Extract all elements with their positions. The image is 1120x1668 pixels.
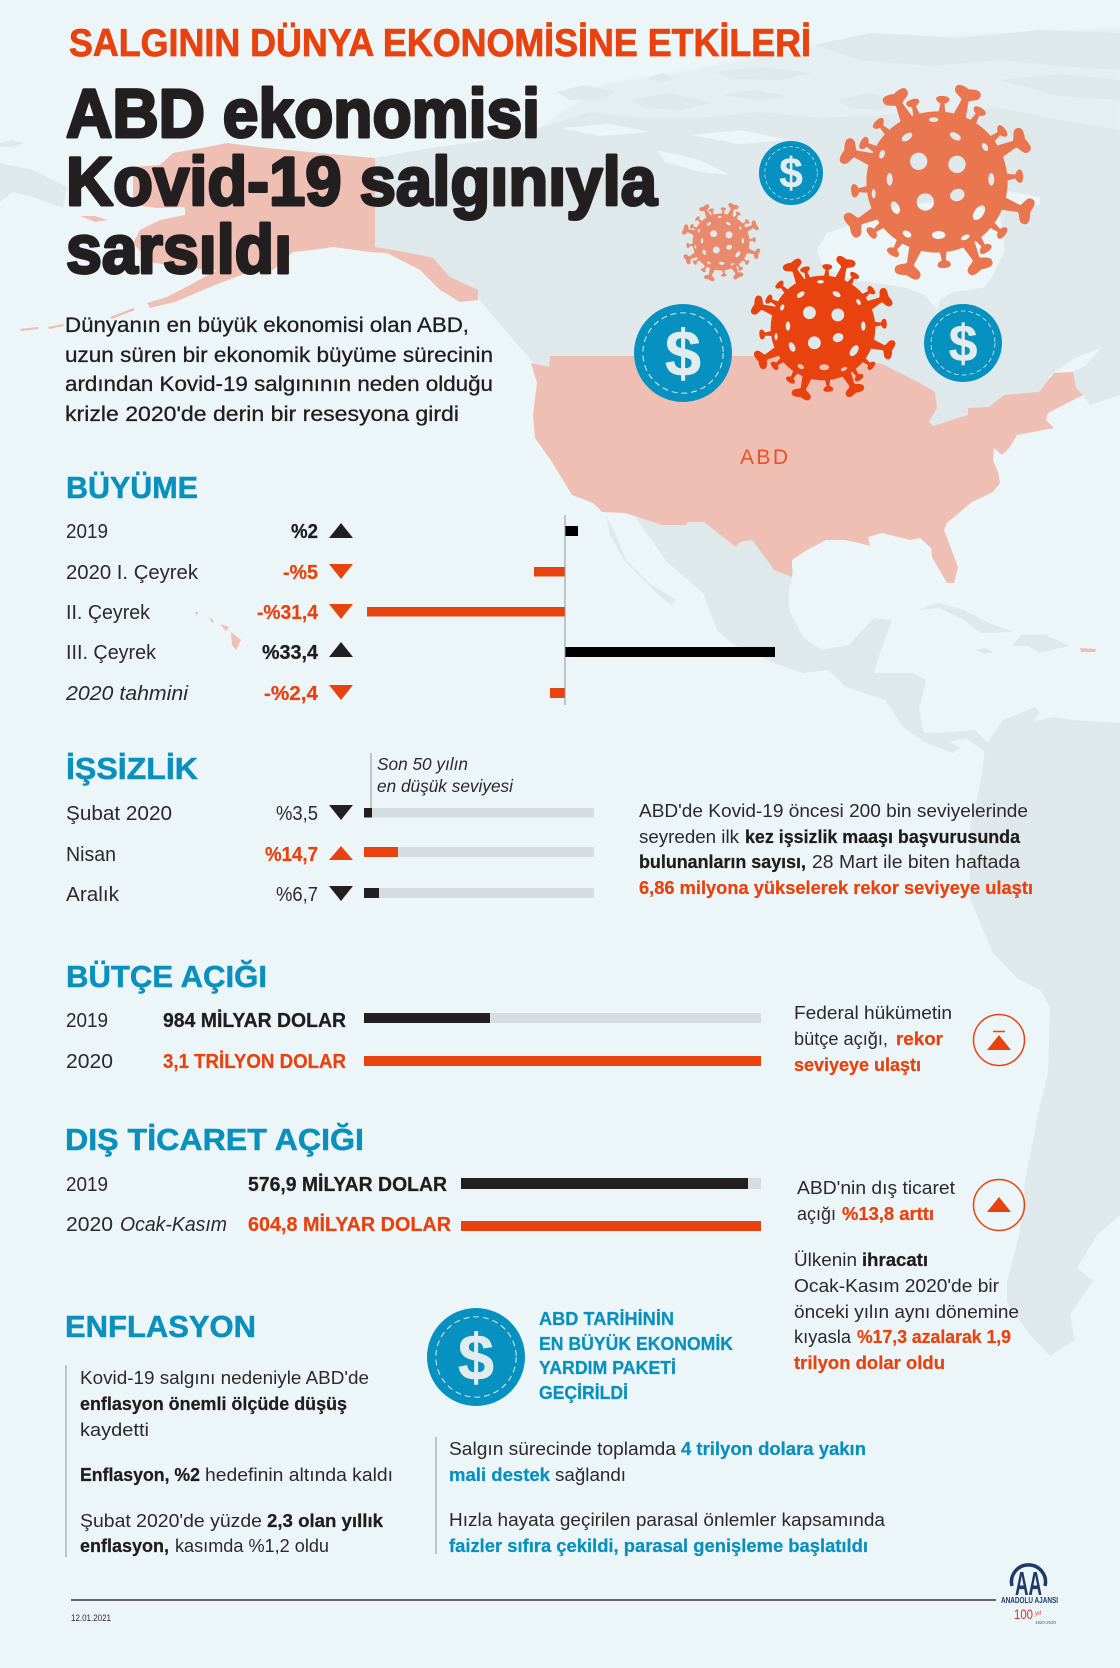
- trade row labels: Ocak-Kasım: [120, 1213, 227, 1236]
- logo: Anadolu Ajansı: [1001, 1565, 1058, 1625]
- logo: Anadolu Ajansı: 100: [1014, 1606, 1033, 1622]
- heading: trade deficit: DIŞ TİCARET AÇIĞI: [65, 1122, 364, 1157]
- trade row labels: 2020: [66, 1213, 113, 1236]
- logo: Anadolu Ajansı: AA: [1015, 1565, 1042, 1602]
- main title: [66, 75, 658, 288]
- budget row labels: 2020: [66, 1050, 113, 1073]
- unemployment note: bulunanların sayısı,: [639, 851, 806, 872]
- land: Canada and Arctic: [0, 30, 1120, 430]
- exports note: trilyon dolar oldu: [794, 1352, 945, 1373]
- stimulus text: 4 trilyon dolara yakın: [681, 1438, 866, 1459]
- budget note: [794, 1002, 952, 1075]
- annotation: lowest level in 50 years: Son 50 yılın: [377, 754, 468, 774]
- growth values: [257, 520, 319, 705]
- inflation text: kaydetti: [80, 1419, 149, 1440]
- land: South America: [970, 707, 1120, 1356]
- intro text: Dünyanın en büyük ekonomisi olan ABD,: [65, 313, 469, 337]
- stimulus text: faizler sıfıra çekildi, parasal genişleme başlatıldı: [449, 1535, 868, 1556]
- unemployment row labels: Aralık: [66, 883, 120, 906]
- icon: dollar coin small: $: [779, 150, 803, 197]
- trade row labels: 604,8 MİLYAR DOLAR: [248, 1213, 451, 1236]
- land: Mexico and Central America: [626, 500, 990, 753]
- logo: Anadolu Ajansı: 1920-2020: [1035, 1620, 1056, 1625]
- unemployment trend arrows: [329, 805, 353, 901]
- sea: Hudson Bay and streaks: [560, 124, 1102, 380]
- icon: increase: [974, 1180, 1024, 1230]
- stimulus text: mali destek: [449, 1464, 551, 1485]
- panel: trade deficit: [65, 1122, 1024, 1373]
- unemployment bar chart: [364, 808, 594, 898]
- icon: dollar coin right: $: [949, 314, 977, 372]
- icon: dollar coin right: [924, 304, 1002, 382]
- stimulus heading: [539, 1308, 734, 1403]
- budget note: seviyeye ulaştı: [794, 1054, 921, 1075]
- USA mainland: [531, 356, 1083, 583]
- panel: unemployment: [66, 751, 1033, 906]
- heading: inflation: ENFLASYON: [65, 1309, 256, 1344]
- heading: unemployment: İŞSİZLİK: [66, 751, 199, 786]
- panel: stimulus package: [427, 1308, 886, 1556]
- inflation text: Şubat 2020'de yüzde: [80, 1510, 262, 1531]
- inflation text: 2,3 olan yıllık: [267, 1510, 384, 1531]
- world map background: [0, 28, 1120, 1356]
- unemployment note: kez işsizlik maaşı başvurusunda: [745, 826, 1021, 847]
- inflation text: hedefinin altında kaldı: [205, 1464, 393, 1485]
- stimulus heading: ABD TARİHİNİN: [539, 1308, 674, 1329]
- growth trend arrows: [329, 523, 353, 700]
- unemployment note: [639, 800, 1033, 898]
- unemployment note: seyreden ilk: [639, 826, 740, 847]
- stimulus text: [436, 1437, 886, 1556]
- trade row labels: 576,9 MİLYAR DOLAR: [248, 1173, 447, 1196]
- heading: budget deficit: BÜTÇE AÇIĞI: [66, 959, 267, 994]
- label: ABD: ABD: [740, 446, 788, 469]
- stimulus text: Salgın sürecinde toplamda: [449, 1438, 677, 1459]
- trade row labels: [66, 1173, 451, 1236]
- growth row labels: II. Çeyrek: [66, 601, 151, 624]
- unemployment values: %6,7: [276, 883, 318, 906]
- land: Baja California: [606, 515, 676, 605]
- Alaska: [20, 143, 478, 331]
- exports note: Ülkenin: [794, 1249, 857, 1270]
- stimulus heading: GEÇİRİLDİ: [539, 1382, 628, 1403]
- Arctic haze: [540, 28, 1120, 135]
- budget row labels: [66, 1009, 346, 1073]
- footer rule: [71, 1599, 996, 1601]
- Hawaii: [195, 612, 241, 650]
- annotation: lowest level in 50 years: en düşük seviyesi: [377, 776, 514, 796]
- inflation text: kasımda %1,2 oldu: [175, 1535, 329, 1556]
- inflation text: [66, 1365, 393, 1557]
- land: Caribbean islands: [917, 603, 1069, 654]
- logo: Anadolu Ajansı: yıl: [1034, 1611, 1042, 1617]
- unemployment values: [265, 802, 318, 906]
- unemployment values: %3,5: [276, 802, 318, 825]
- heading: growth: BÜYÜME: [66, 470, 198, 505]
- growth row labels: 2020 I. Çeyrek: [66, 561, 199, 584]
- unemployment row labels: [66, 802, 172, 906]
- trade note: %13,8 arttı: [842, 1203, 934, 1224]
- budget note: bütçe açığı,: [794, 1028, 888, 1049]
- kicker heading: SALGININ DÜNYA EKONOMİSİNE ETKİLERİ: [69, 22, 811, 65]
- budget row labels: 2019: [66, 1009, 108, 1032]
- growth values: -%31,4: [257, 601, 319, 624]
- budget note: rekor: [896, 1028, 943, 1049]
- exports note: kıyasla: [794, 1326, 852, 1347]
- inflation text: enflasyon önemli ölçüde düşüş: [80, 1393, 347, 1414]
- logo: Anadolu Ajansı: ANADOLU AJANSI: [1001, 1595, 1058, 1605]
- exports note: ihracatı: [862, 1249, 928, 1270]
- stimulus text: Hızla hayata geçirilen parasal önlemler kapsamında: [449, 1509, 886, 1530]
- trade note: ABD'nin dış ticaret: [797, 1177, 955, 1198]
- unemployment note: 28 Mart ile biten haftada: [812, 851, 1021, 872]
- unemployment note: ABD'de Kovid-19 öncesi 200 bin seviyelerinde: [639, 800, 1028, 821]
- unemployment row labels: Nisan: [66, 843, 116, 866]
- icon: record high: [974, 1014, 1024, 1066]
- main title: ABD ekonomisi: [66, 75, 540, 152]
- icon: small coronavirus: [681, 202, 761, 282]
- trade note: açığı: [797, 1203, 836, 1224]
- growth values: -%5: [283, 561, 318, 584]
- growth values: -%2,4: [264, 682, 319, 705]
- main title: sarsıldı: [66, 211, 292, 288]
- intro text: krizle 2020'de derin bir resesyona girdi: [65, 402, 459, 426]
- budget note: Federal hükümetin: [794, 1002, 952, 1023]
- growth row labels: III. Çeyrek: [66, 641, 157, 664]
- trade bar chart: [461, 1178, 761, 1231]
- intro text: ardından Kovid-19 salgınının neden olduğu: [65, 372, 493, 396]
- budget bar chart: [364, 1013, 761, 1066]
- inflation text: enflasyon,: [80, 1535, 169, 1556]
- main title: Kovid-19 salgınıyla: [66, 143, 658, 220]
- trade note: [797, 1177, 955, 1224]
- growth row labels: 2019: [66, 520, 108, 543]
- intro text: uzun süren bir ekonomik büyüme sürecinin: [65, 343, 493, 367]
- icon: dollar coin stimulus: $: [458, 1321, 494, 1394]
- icon: dollar coin stimulus: [427, 1308, 525, 1406]
- intro text: [65, 313, 493, 426]
- unemployment values: %14,7: [265, 843, 318, 866]
- panel: budget deficit: [66, 959, 1024, 1075]
- unemployment row labels: Şubat 2020: [66, 802, 172, 825]
- exports note: önceki yılın aynı dönemine: [794, 1301, 1019, 1322]
- Puerto Rico: [1080, 648, 1096, 652]
- budget row labels: 984 MİLYAR DOLAR: [163, 1009, 346, 1032]
- growth row labels: [65, 520, 199, 705]
- icon: dollar coin large: [634, 304, 732, 402]
- budget row labels: 3,1 TRİLYON DOLAR: [163, 1050, 346, 1073]
- panel: growth: [65, 470, 775, 705]
- icon: dollar coin small: [759, 141, 823, 205]
- icon: medium coronavirus: [750, 255, 896, 401]
- inflation text: Enflasyon, %2: [80, 1464, 200, 1485]
- exports note: [794, 1249, 1019, 1373]
- exports note: %17,3 azalarak 1,9: [857, 1326, 1011, 1347]
- date: 12.01.2021: [71, 1613, 111, 1623]
- stimulus heading: YARDIM PAKETİ: [539, 1357, 676, 1378]
- icon: large coronavirus: [838, 83, 1036, 281]
- growth bar chart: [367, 515, 775, 705]
- annotation: lowest level in 50 years: [371, 753, 514, 808]
- unemployment note: 6,86 milyona yükselerek rekor seviyeye ulaştı: [639, 877, 1033, 898]
- growth row labels: 2020 tahmini: [65, 682, 189, 705]
- inflation text: Kovid-19 salgını nedeniyle ABD'de: [80, 1367, 369, 1388]
- growth values: %2: [291, 520, 318, 543]
- icon: dollar coin large: $: [665, 317, 701, 390]
- trade row labels: 2019: [66, 1173, 108, 1196]
- panel: inflation: [65, 1309, 393, 1557]
- exports note: Ocak-Kasım 2020'de bir: [794, 1275, 999, 1296]
- growth values: %33,4: [262, 641, 319, 664]
- stimulus heading: EN BÜYÜK EKONOMİK: [539, 1333, 734, 1354]
- stimulus text: sağlandı: [555, 1464, 626, 1485]
